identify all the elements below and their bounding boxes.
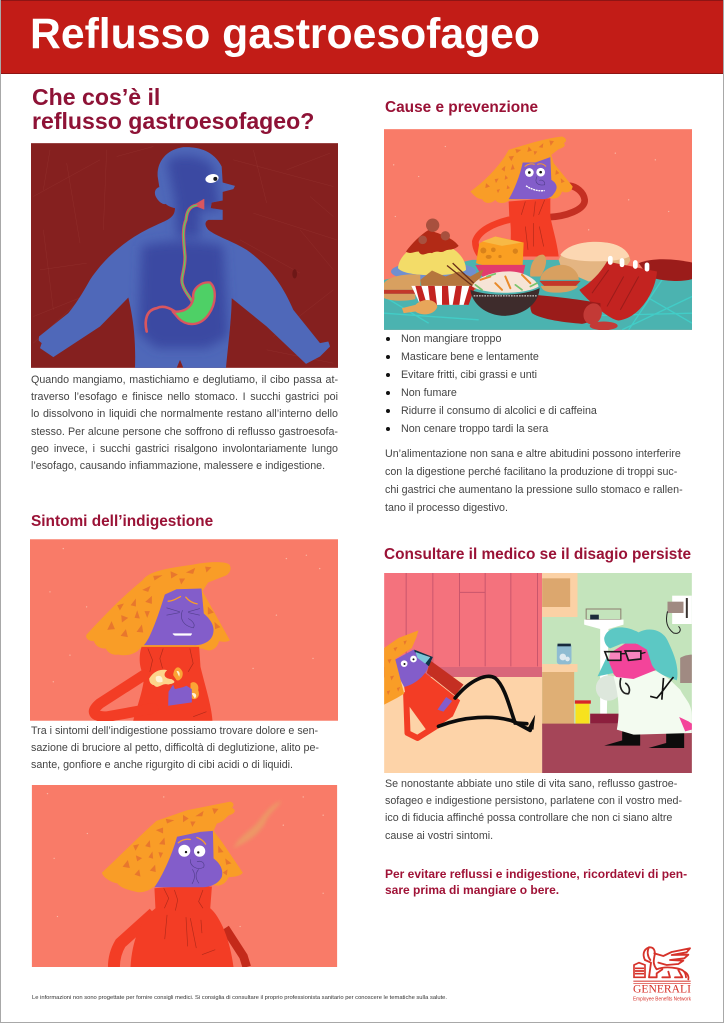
illustration: unhealthy food	[384, 129, 692, 330]
hair	[86, 562, 231, 655]
cheese	[475, 236, 525, 276]
paragraph: symptoms: Tra i sintomi dell’indigestione possiamo trovare dolore e sen-	[31, 725, 318, 737]
paragraph: what is reflux: traverso l’esofago e finisce nello stomaco. I succhi gastrici poi	[31, 391, 338, 403]
eyes	[178, 845, 190, 857]
arms	[225, 928, 247, 967]
paragraph: habits: con la digestione perché facilitano la produzione di troppi suc-	[385, 466, 677, 478]
list: prevention tips: Non cenare troppo tardi la sera	[401, 423, 548, 435]
list: prevention tips: Evitare fritti, cibi grassi e unti	[401, 369, 537, 381]
list: prevention tips: Ridurre il consumo di alcolici e di caffeina	[401, 405, 597, 417]
paragraph: habits: chi gastrici che aumentano la pressione sullo stomaco e rallen-	[385, 484, 683, 496]
sweater and arm	[133, 647, 212, 721]
list: prevention tips	[386, 333, 597, 435]
table	[384, 260, 692, 330]
illustration: digestive system	[31, 143, 338, 368]
paragraph: see a doctor	[385, 778, 682, 842]
closing advice	[385, 867, 687, 897]
paragraph: what is reflux	[31, 374, 338, 472]
paragraph: habits: tano il processo digestivo.	[385, 502, 508, 514]
header banner	[0, 0, 724, 74]
pasta with meatballs	[391, 218, 476, 282]
title: Reflusso gastroesofageo	[30, 10, 540, 58]
closing advice: Per evitare reflussi e indigestione, ricordatevi di pen-	[385, 867, 687, 881]
paragraph: what is reflux: Quando mangiamo, mastichiamo e deglutiamo, il cibo passa at-	[31, 374, 338, 386]
glasses	[605, 651, 641, 660]
heading: causes: Cause e prevenzione	[385, 99, 538, 116]
flames	[149, 670, 174, 687]
logo: Generali	[633, 946, 691, 1003]
body silhouette	[39, 147, 330, 368]
paragraph: see a doctor: ico di fiducia affinché possa controllare che non ci siano altre	[385, 812, 672, 824]
rice bowl	[470, 271, 540, 316]
heading: see a doctor: Consultare il medico se il disagio persiste	[384, 546, 691, 563]
esophagus and stomach	[146, 199, 215, 332]
list: prevention tips: Non fumare	[401, 387, 457, 399]
heading: symptoms: Sintomi dell’indigestione	[31, 513, 213, 530]
background	[384, 129, 692, 330]
background	[32, 785, 337, 967]
character	[102, 802, 247, 967]
character	[86, 562, 231, 721]
face	[144, 589, 214, 645]
illustration: phone call and doctor	[384, 573, 692, 773]
logo: Generali: Employee Benefits Network	[633, 997, 691, 1003]
wordmark: GENERALI	[633, 981, 691, 995]
character	[470, 136, 585, 260]
closing advice: sare prima di mangiare o bere.	[385, 883, 559, 897]
lion body and mane	[644, 947, 690, 979]
paragraph: what is reflux: geo invece, i succhi gastrici risalgono involontariamente lungo	[31, 443, 338, 455]
sweater	[131, 886, 233, 967]
paragraph: what is reflux: lo dissolvono in liquidi che normalmente restano all’interno dello	[31, 408, 338, 420]
paragraph: symptoms	[31, 725, 319, 771]
reclining character	[427, 660, 464, 696]
paragraph: symptoms: sazione di bruciore al petto, difficoltà di deglutizione, alito pe-	[31, 742, 319, 754]
heading: what is reflux: reflusso gastroesofageo?	[32, 108, 314, 134]
eye	[205, 173, 219, 184]
left scene: room	[384, 573, 542, 773]
book	[634, 963, 645, 977]
face	[154, 831, 222, 887]
right scene: doctor	[542, 573, 692, 773]
burgers	[384, 255, 581, 301]
ribs and salami	[530, 242, 692, 330]
paragraph: what is reflux: l’esofago, causando infiammazione, malessere e indigestione.	[31, 460, 325, 472]
hair	[470, 136, 573, 203]
breath plume	[233, 801, 282, 848]
paragraph: see a doctor: Se nonostante abbiate uno stile di vita sano, reflusso gastroe-	[385, 778, 677, 790]
hair	[102, 802, 243, 892]
heading: what is reflux: Che cos’è il	[32, 84, 160, 110]
background	[31, 143, 338, 368]
background	[30, 539, 338, 721]
paragraph: see a doctor: cause ai vostri sintomi.	[385, 830, 493, 842]
heading: what is reflux	[32, 84, 314, 134]
face	[509, 157, 557, 199]
paragraph: habits	[385, 448, 683, 514]
paragraph: what is reflux: stesso. Per alcune persone che soffrono di reflusso gastroesofa-	[31, 426, 338, 438]
fries box and chicken	[402, 263, 484, 314]
illustration: chest burning	[30, 539, 338, 721]
list: prevention tips: Masticare bene e lentamente	[401, 351, 539, 363]
disclaimer: Le informazioni non sono progettate per fornire consigli medici. Si consiglia di consultare il proprio professionista sanitario per conoscere le tematiche sulla salute.	[32, 995, 447, 1001]
paragraph: symptoms: sante, gonfiore e anche rigurgito di cibi acidi o di liquidi.	[31, 759, 293, 771]
illustration: bad breath	[32, 785, 338, 967]
hand	[168, 684, 192, 706]
paragraph: habits: Un’alimentazione non sana e altre abitudini possono interferire	[385, 448, 681, 460]
list: prevention tips: Non mangiare troppo	[401, 333, 501, 345]
paragraph: see a doctor: sofageo e indigestione persistono, parlatene con il vostro med-	[385, 795, 682, 807]
